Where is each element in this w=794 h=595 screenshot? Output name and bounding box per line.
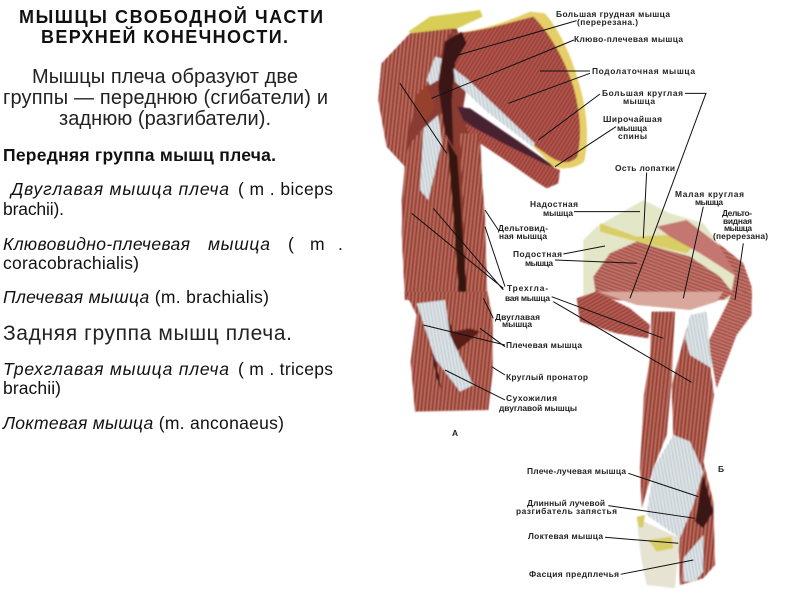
olecranon yellow [637, 515, 673, 552]
intro paragraph: группы — переднюю (сгибатели) и [3, 87, 328, 109]
anatomical labels: разгибатель запястья [516, 506, 617, 516]
infraspinatus [593, 242, 733, 300]
long head fragment [577, 292, 650, 338]
leader lines [400, 21, 743, 300]
forearm fascia [683, 535, 703, 582]
item: coracobrachialis: coracobrachialis) [3, 253, 139, 273]
item: biceps: Двуглавая мышца плеча [9, 179, 229, 199]
anatomical labels: мышца [623, 96, 655, 106]
anatomical labels: Локтевая мышца [528, 531, 603, 541]
intro paragraph: Мышцы плеча образуют две [32, 66, 298, 88]
deltoid B [718, 243, 752, 300]
illustration A: anterior arm [378, 10, 587, 300]
anatomical labels: Подолаточная мышца [592, 66, 695, 76]
intro paragraph: заднюю (разгибатели). [59, 108, 271, 130]
item: biceps: brachii). [3, 199, 64, 219]
anatomical labels: спины [618, 131, 647, 141]
spine of scapula [600, 223, 693, 253]
scapula rim [453, 12, 587, 168]
anatomical labels: Надостная [530, 199, 578, 209]
item: coracobrachialis: ( [288, 234, 294, 254]
anatomical labels: мышца [502, 319, 532, 329]
item: coracobrachialis: m [310, 234, 325, 254]
anatomical labels: мышца [695, 197, 723, 207]
illustration B: posterior arm [583, 200, 752, 300]
intro paragraph [3, 66, 328, 130]
left text column [2, 6, 343, 433]
item: triceps: brachii) [3, 378, 61, 398]
supraspinatus [657, 220, 743, 277]
anatomical labels: двуглавой мышцы [499, 403, 577, 413]
dark axilla [438, 32, 467, 147]
anatomical labels: Дельтовид- [498, 223, 548, 233]
item: coracobrachialis: . [338, 234, 343, 254]
anatomical labels: Большая грудная мышца [556, 9, 670, 19]
arm silhouette [378, 28, 487, 300]
item: brachialis: Плечевая мышца (m. brachialis) [3, 287, 269, 307]
lateral triceps [640, 312, 675, 508]
anatomical labels: Трехгла- [507, 283, 548, 293]
anatomical labels: Подостная [513, 249, 562, 259]
item: biceps [3, 179, 333, 219]
dark gap [432, 352, 442, 390]
anatomical labels [452, 9, 768, 579]
item: triceps: ( m . triceps [238, 359, 333, 379]
leader lines lower [423, 297, 698, 574]
elbow [637, 518, 680, 588]
item: triceps: Трехглавая мышца плеча [3, 359, 229, 379]
anatomical labels: Двуглавая [495, 312, 540, 322]
anatomical labels: Дельто- [722, 208, 752, 218]
anatomical labels: мышца [617, 123, 647, 133]
anatomical labels: Малая круглая [675, 189, 744, 199]
dark groove [447, 140, 467, 300]
teres band [597, 292, 723, 310]
item: anconaeus: Локтевая мышца (m. anconaeus) [2, 413, 284, 433]
anatomical labels: Круглый пронатор [506, 372, 588, 382]
acromion [408, 10, 483, 33]
deltoid stump [708, 292, 752, 388]
anatomical labels: Большая круглая [602, 88, 683, 98]
title: ВЕРХНЕЙ КОНЕЧНОСТИ. [41, 26, 288, 47]
dark shadow [695, 475, 713, 528]
latissimus band [457, 107, 555, 168]
anatomical labels: Плечевая мышца [506, 340, 582, 350]
illustration B: arm [577, 292, 752, 588]
anatomical labels: Клюво-плечевая мышца [574, 34, 683, 44]
item: coracobrachialis: Клювовидно-плечевая [3, 234, 190, 254]
anatomical labels: мышца [543, 208, 573, 218]
anatomical labels: Б [718, 464, 724, 474]
anatomical labels: видная [723, 216, 752, 226]
biceps [402, 113, 463, 300]
illustration A: forearm [405, 292, 493, 412]
anatomical labels: Плече-лучевая мышца [527, 466, 626, 476]
anatomical labels: мышца [724, 223, 752, 233]
item: biceps: ( m . biceps [238, 179, 333, 199]
anatomical labels: Длинный лучевой [527, 498, 605, 508]
triceps [460, 133, 487, 300]
long triceps [672, 328, 715, 585]
item: triceps [3, 359, 333, 398]
item: coracobrachialis [3, 234, 343, 273]
heading: anterior group: Передняя группа мышц плеча. [3, 145, 276, 165]
item: coracobrachialis: мышца [208, 234, 270, 254]
forearm muscles [405, 292, 493, 412]
deltoid [378, 28, 453, 167]
title: МЫШЦЫ СВОБОДНОЙ ЧАСТИ [19, 6, 323, 27]
anatomical labels: Ость лопатки [615, 163, 675, 173]
tendon column [427, 57, 442, 85]
heading: posterior group: Задняя группа мышц плеча. [3, 322, 292, 345]
anatomical labels: мышца [525, 258, 553, 268]
anatomical labels: Широчайшая [603, 114, 662, 124]
bicipital aponeurosis [417, 300, 473, 392]
title [19, 6, 323, 47]
anatomical labels: Фасция предплечья [529, 569, 619, 579]
scapula pale [583, 200, 752, 300]
upper tendon [685, 312, 712, 368]
brachioradialis shadow [442, 315, 480, 352]
triceps tendon [647, 435, 703, 538]
anatomical labels: (перерезана.) [577, 17, 638, 27]
pale tendon band [453, 68, 535, 147]
anatomical labels: А [452, 428, 458, 438]
pectoralis stump [415, 85, 435, 120]
subscapularis [452, 17, 580, 162]
anatomical labels: ная мышца [499, 231, 547, 241]
anatomical labels: вая мышца [505, 293, 550, 303]
anatomical labels: (перерезана) [713, 231, 768, 241]
anatomical labels: Сухожилия [506, 393, 557, 403]
biceps tendon [420, 115, 442, 200]
teres major [465, 123, 560, 188]
